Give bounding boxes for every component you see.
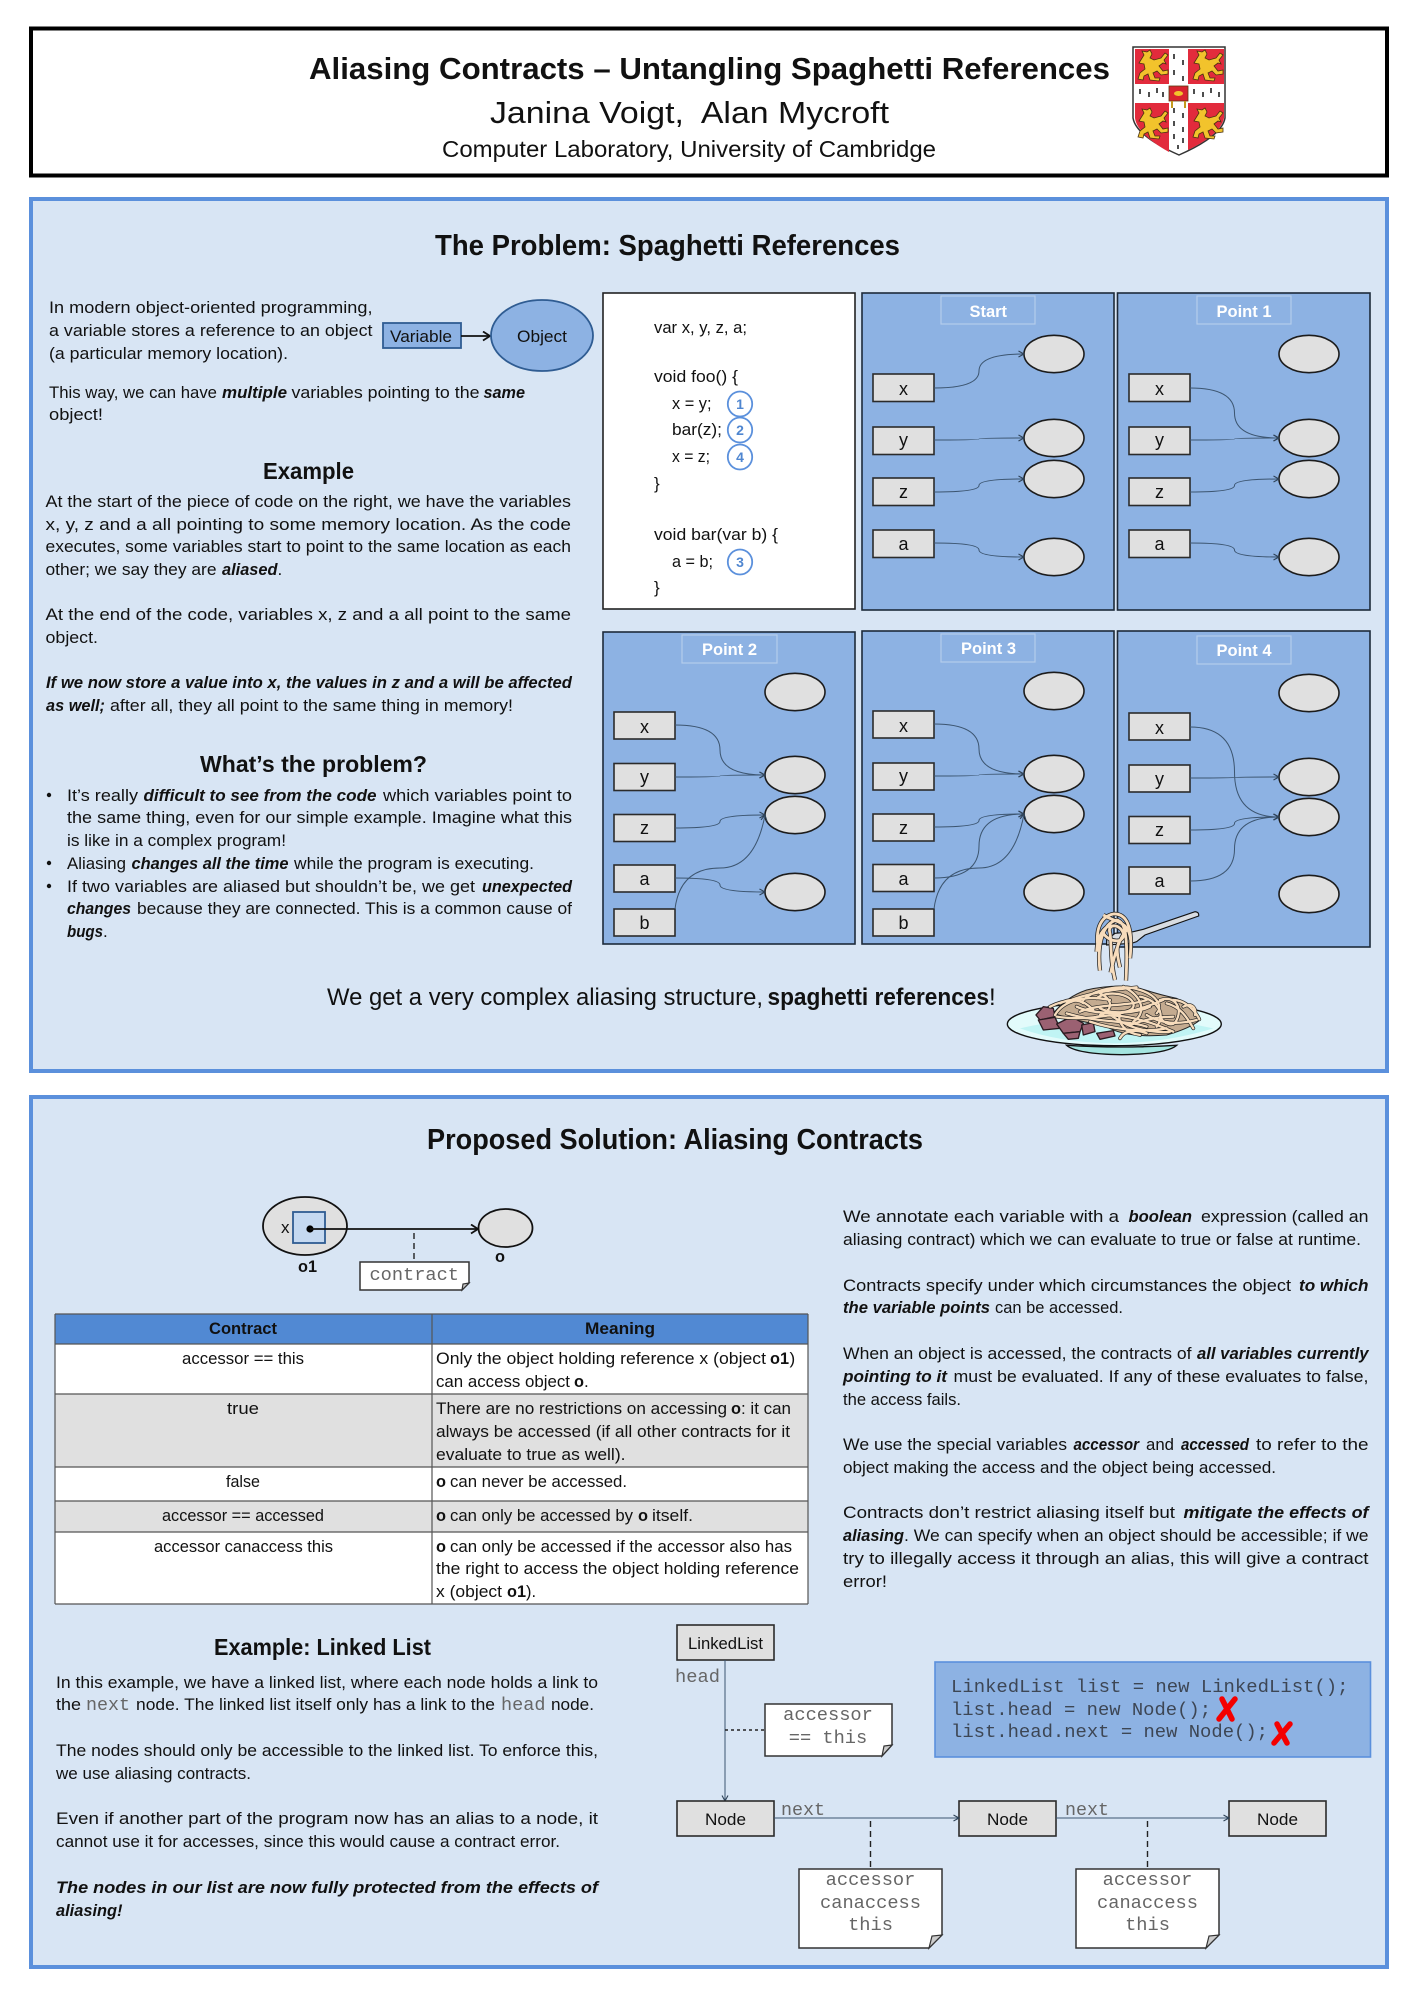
- note: accessor canaccess this: canaccess: [820, 1892, 921, 1914]
- diagram: point 2: a: [639, 869, 650, 889]
- diagram: linked list: next: [1065, 1799, 1109, 1821]
- text block: contract explanation: to refer to the: [1256, 1435, 1368, 1454]
- text block: contract explanation: the variable points: [843, 1298, 990, 1317]
- diagram: start state: a: [898, 534, 909, 554]
- text block: linked list example: The nodes in our list are now fully protected from the effects of: [56, 1878, 600, 1897]
- panel: code listing: a = b;: [672, 552, 713, 571]
- heading: proposed solution: Proposed Solution: Aliasing Contracts: [427, 1124, 923, 1156]
- diagram: linked list: [675, 1625, 1326, 1948]
- text block: contract explanation: object making the access and the object being accessed.: [843, 1458, 1276, 1477]
- panel: code listing: bar(z);: [672, 420, 722, 439]
- diagram: point 1: z: [1155, 482, 1164, 502]
- bullet list: problems: changes all the time: [132, 854, 288, 873]
- text block: linked list example: The nodes should only be accessible to the linked list. To enforce this,: [56, 1741, 598, 1760]
- bullet list: problems: It’s really: [67, 786, 139, 805]
- text block: introduction: (a particular memory location).: [49, 344, 288, 363]
- text block: introduction: same: [484, 383, 525, 402]
- diagram: point 1: Point 1: [1216, 302, 1272, 321]
- note: accessor canaccess this, second: this: [1125, 1914, 1170, 1936]
- diagram: point 2: x: [640, 717, 649, 737]
- text block: example: aliased: [222, 560, 278, 579]
- diagram: point 2: z: [640, 818, 649, 838]
- text block: example: object.: [46, 628, 98, 647]
- table: contracts and meanings: o1: [770, 1349, 789, 1368]
- title: Aliasing Contracts – Untangling Spaghetti References: [309, 51, 1110, 86]
- text block: contract explanation: try to illegally access it through an alias, this will give a contract: [843, 1549, 1369, 1568]
- bullet list: problems: If two variables are aliased but shouldn’t be, we get: [67, 877, 475, 896]
- text block: linked list example: node.: [551, 1695, 594, 1714]
- icon: plate of spaghetti and fork: [1007, 912, 1221, 1055]
- panel: code listing: x = z;: [672, 447, 710, 466]
- table: contracts and meanings: always be accessed (if all other contracts for it: [436, 1422, 790, 1441]
- diagram: point 3: Point 3: [961, 639, 1016, 658]
- diagram: linked list: next: [781, 1799, 825, 1821]
- text block: contract explanation: Contracts specify under which circumstances the object: [843, 1276, 1291, 1295]
- diagram: point 3: [862, 631, 1114, 944]
- table: contracts and meanings: can access object: [436, 1372, 570, 1391]
- diagram: point 3: a: [898, 869, 909, 889]
- text block: linked list example: we use aliasing contracts.: [55, 1764, 251, 1783]
- text block: contract explanation: and: [1146, 1435, 1174, 1454]
- text block: contract explanation: accessed: [1181, 1435, 1250, 1454]
- text block: linked list example: [55, 1673, 600, 1920]
- diagram: point 1: y: [1155, 430, 1164, 450]
- diagram: point 1: x: [1155, 379, 1164, 399]
- diagram: linked list: head: [675, 1666, 720, 1688]
- diagram: start state: z: [899, 482, 908, 502]
- table: contracts and meanings: Only the object holding reference x (object: [436, 1349, 766, 1368]
- note: accessor == this: [765, 1704, 892, 1756]
- diagram: point 4: [1118, 631, 1370, 947]
- note: accessor canaccess this, second: [1076, 1869, 1219, 1948]
- table: contracts and meanings: o: [436, 1472, 446, 1491]
- text block: contract explanation: must be evaluated. If any of these evaluates to false,: [954, 1367, 1368, 1386]
- table: contracts and meanings: Contract: [209, 1319, 277, 1338]
- text block: linked list example: Even if another part of the program now has an alias to a node, it: [56, 1809, 598, 1828]
- text block: introduction: In modern object-oriented programming,: [49, 298, 372, 317]
- diagram: point 4: a: [1154, 871, 1165, 891]
- bullet list: problems: the same thing, even for our simple example. Imagine what this: [67, 808, 572, 827]
- text block: example: If we now store a value into x, the values in z and a will be affected: [46, 673, 573, 692]
- text block: contract explanation: the access fails.: [843, 1390, 961, 1409]
- text block: linked list example: aliasing!: [56, 1901, 123, 1920]
- text block: example: as well;: [46, 696, 105, 715]
- panel: code listing: var x, y, z, a;: [654, 318, 747, 337]
- step marker 3: 3: [736, 554, 744, 570]
- icon: red cross 1: [1219, 1699, 1235, 1719]
- diagram: point 3: z: [899, 818, 908, 838]
- text block: contract explanation: [842, 1207, 1371, 1591]
- text block: linked list example: node. The linked list itself only has a link to the: [136, 1695, 495, 1714]
- note: accessor canaccess this: [799, 1869, 942, 1948]
- text block: example: .: [278, 560, 282, 579]
- header box: [31, 28, 1387, 176]
- text block: example: other; we say they are: [46, 560, 216, 579]
- diagram: contract on a reference: contract: [370, 1264, 459, 1286]
- diagram: point 1: a: [1154, 534, 1165, 554]
- panel: proposed solution: [31, 1097, 1387, 1967]
- text block: introduction: a variable stores a reference to an object: [49, 321, 373, 340]
- table: contracts and meanings: itself.: [652, 1506, 693, 1525]
- table: contracts and meanings: .: [584, 1372, 589, 1391]
- table: contracts and meanings: false: [226, 1472, 260, 1491]
- conclusion sentence: [327, 984, 996, 1011]
- bullet list: problems: Aliasing: [67, 854, 126, 873]
- code box: linked list usage: list.head.next = new Node();: [951, 1721, 1268, 1743]
- text block: contract explanation: When an object is accessed, the contracts of: [843, 1344, 1192, 1363]
- diagram: linked list: Node: [705, 1810, 746, 1829]
- icon: red cross 2: [1274, 1724, 1290, 1743]
- diagram: point 1: [1118, 293, 1370, 610]
- bullet list: problems: is like in a complex program!: [67, 831, 286, 850]
- text block: example: x, y, z and a all pointing to some memory location. As the code: [46, 515, 571, 534]
- text block: linked list example: the: [56, 1695, 81, 1714]
- bullet list: problems: changes: [67, 899, 131, 918]
- text block: contract explanation: boolean: [1128, 1207, 1192, 1226]
- table: contracts and meanings: accessor == accessed: [162, 1506, 324, 1525]
- diagram: start state: [862, 293, 1114, 610]
- code box: linked list usage: LinkedList list = new LinkedList();: [951, 1676, 1348, 1698]
- note: accessor == this: accessor: [783, 1704, 873, 1726]
- note: accessor == this: == this: [789, 1727, 867, 1749]
- text block: contract explanation: Contracts don’t restrict aliasing itself but: [843, 1503, 1175, 1522]
- text block: example: [46, 492, 573, 715]
- heading: the problem: The Problem: Spaghetti References: [435, 230, 900, 262]
- bullet list: problems: because they are connected. This is a common cause of: [137, 899, 572, 918]
- heading: what's the problem: What’s the problem?: [200, 751, 427, 777]
- table: contracts and meanings: ): [790, 1349, 795, 1368]
- bullet list: problems: bugs: [67, 922, 103, 941]
- panel: code listing: [603, 293, 855, 609]
- step marker 1: [728, 392, 752, 416]
- diagram: start state: x: [899, 379, 908, 399]
- diagram: point 2: Point 2: [702, 640, 757, 659]
- table: contracts and meanings: can only be accessed if the accessor also has: [450, 1537, 792, 1556]
- bullet list: problems: unexpected: [482, 877, 573, 896]
- text block: contract explanation: aliasing contract) which we can evaluate to true or false at runtime.: [843, 1230, 1361, 1249]
- table: contracts and meanings: There are no restrictions on accessing: [436, 1399, 727, 1418]
- text block: introduction: object!: [49, 405, 103, 424]
- text block: example: executes, some variables start to point to the same location as each: [46, 537, 571, 556]
- diagram: point 3: x: [899, 716, 908, 736]
- table: contracts and meanings: can never be accessed.: [450, 1472, 627, 1491]
- text block: contract explanation: aliasing: [843, 1526, 905, 1545]
- note: accessor canaccess this: accessor: [826, 1869, 915, 1891]
- diagram: point 2: b: [639, 913, 650, 933]
- diagram: linked list: Node: [1257, 1810, 1298, 1829]
- table: contracts and meanings: o: [436, 1537, 446, 1556]
- diagram: linked list: LinkedList: [688, 1634, 763, 1653]
- diagram: contract on a reference: o: [495, 1247, 505, 1266]
- step marker 2: [728, 418, 752, 442]
- step marker 3: [728, 550, 752, 574]
- icon: university crest: [1133, 47, 1225, 155]
- diagram: point 3: y: [899, 766, 908, 786]
- code box: linked list usage: [935, 1662, 1370, 1757]
- diagram: linked list: Node: [987, 1810, 1028, 1829]
- text block: contract explanation: to which: [1299, 1276, 1368, 1295]
- text block: contract explanation: error!: [843, 1572, 887, 1591]
- text block: contract explanation: can be accessed.: [995, 1298, 1123, 1317]
- table: contracts and meanings: Meaning: [585, 1319, 655, 1338]
- text block: example: after all, they all point to the same thing in memory!: [110, 696, 513, 715]
- code box: linked list usage: list.head = new Node();: [951, 1699, 1211, 1721]
- panel: code listing: x = y;: [672, 394, 712, 413]
- table: contracts and meanings: true: [227, 1399, 259, 1418]
- diagram: start state: Start: [970, 302, 1007, 321]
- diagram: point 3: b: [898, 913, 909, 933]
- text block: example: At the end of the code, variables x, z and a all point to the same: [46, 605, 571, 624]
- panel: code listing: void bar(var b) {: [654, 525, 778, 544]
- diagram: contract on a reference: x: [281, 1218, 290, 1237]
- table: contracts and meanings: accessor canaccess this: [154, 1537, 333, 1556]
- authors: Janina Voigt, Alan Mycroft: [490, 95, 889, 130]
- heading: example: Example: [263, 458, 354, 484]
- note: accessor canaccess this: this: [848, 1914, 893, 1936]
- table: contracts and meanings: o1: [507, 1582, 526, 1601]
- conclusion sentence: spaghetti references: [768, 984, 989, 1011]
- diagram: variable to object: Object: [517, 327, 567, 346]
- table: contracts and meanings: accessor == this: [182, 1349, 304, 1368]
- text block: contract explanation: all variables currently: [1197, 1344, 1370, 1363]
- step marker 4: 4: [736, 449, 744, 465]
- bullet list: problems: which variables point to: [382, 786, 572, 805]
- text block: contract explanation: accessor: [1074, 1435, 1140, 1454]
- text block: introduction: [49, 298, 525, 424]
- table: contracts and meanings: o: [436, 1506, 446, 1525]
- text block: contract explanation: We annotate each variable with a: [843, 1207, 1120, 1226]
- text block: linked list example: head: [501, 1695, 546, 1716]
- table: contracts and meanings: [55, 1314, 808, 1604]
- diagram: contract on a reference: [263, 1197, 532, 1290]
- table: contracts and meanings: x (object: [436, 1582, 502, 1601]
- diagram: variable to object: [383, 300, 593, 371]
- diagram: point 4: z: [1155, 820, 1164, 840]
- diagram: point 4: y: [1155, 769, 1164, 789]
- text block: example: At the start of the piece of code on the right, we have the variables: [46, 492, 571, 511]
- conclusion sentence: !: [989, 984, 996, 1011]
- table: contracts and meanings: : it can: [741, 1399, 791, 1418]
- bullet list: problems: difficult to see from the code: [144, 786, 376, 805]
- diagram: point 4: x: [1155, 718, 1164, 738]
- panel: code listing: void foo() {: [654, 367, 738, 386]
- panel: the problem: [31, 199, 1387, 1071]
- bullet list: problems: [47, 786, 573, 941]
- panel: code listing: }: [654, 578, 660, 597]
- diagram: start state: y: [899, 430, 908, 450]
- table: contracts and meanings: the right to access the object holding reference: [436, 1559, 799, 1578]
- text block: contract explanation: expression (called an: [1201, 1207, 1368, 1226]
- table: contracts and meanings: can only be accessed by: [450, 1506, 633, 1525]
- bullet list: problems: while the program is executing.: [293, 854, 534, 873]
- table: contracts and meanings: o: [574, 1372, 584, 1391]
- table: contracts and meanings: ).: [526, 1582, 536, 1601]
- note: accessor canaccess this, second: accessor: [1103, 1869, 1192, 1891]
- table: contracts and meanings: o: [638, 1506, 648, 1525]
- heading: example linked list: Example: Linked List: [214, 1634, 431, 1660]
- text block: introduction: This way, we can have: [49, 383, 217, 402]
- diagram: contract on a reference: o1: [298, 1257, 317, 1276]
- text block: introduction: multiple: [222, 383, 287, 402]
- text block: linked list example: next: [86, 1695, 130, 1716]
- diagram: point 2: y: [640, 767, 649, 787]
- diagram: point 2: [603, 632, 855, 944]
- affiliation: Computer Laboratory, University of Cambridge: [442, 136, 936, 162]
- step marker 1: 1: [736, 396, 744, 412]
- text block: linked list example: cannot use it for accesses, since this would cause a contract error.: [56, 1832, 560, 1851]
- text block: contract explanation: mitigate the effects of: [1184, 1503, 1371, 1522]
- conclusion sentence: We get a very complex aliasing structure,: [327, 984, 763, 1011]
- table: contracts and meanings: o: [731, 1399, 741, 1418]
- text block: contract explanation: We use the special variables: [843, 1435, 1067, 1454]
- table: contracts and meanings: evaluate to true as well).: [436, 1445, 626, 1464]
- note: accessor canaccess this, second: canaccess: [1097, 1892, 1198, 1914]
- text block: introduction: variables pointing to the: [292, 383, 480, 402]
- text block: linked list example: In this example, we have a linked list, where each node holds a link to: [56, 1673, 598, 1692]
- bullet list: problems: .: [103, 922, 108, 941]
- diagram: variable to object: Variable: [390, 327, 452, 346]
- text block: contract explanation: . We can specify when an object should be accessible; if we: [904, 1526, 1368, 1545]
- text block: contract explanation: pointing to it: [842, 1367, 948, 1386]
- step marker 4: [728, 444, 752, 470]
- step marker 2: 2: [736, 422, 744, 438]
- panel: code listing: }: [654, 474, 660, 493]
- diagram: point 4: Point 4: [1216, 641, 1272, 660]
